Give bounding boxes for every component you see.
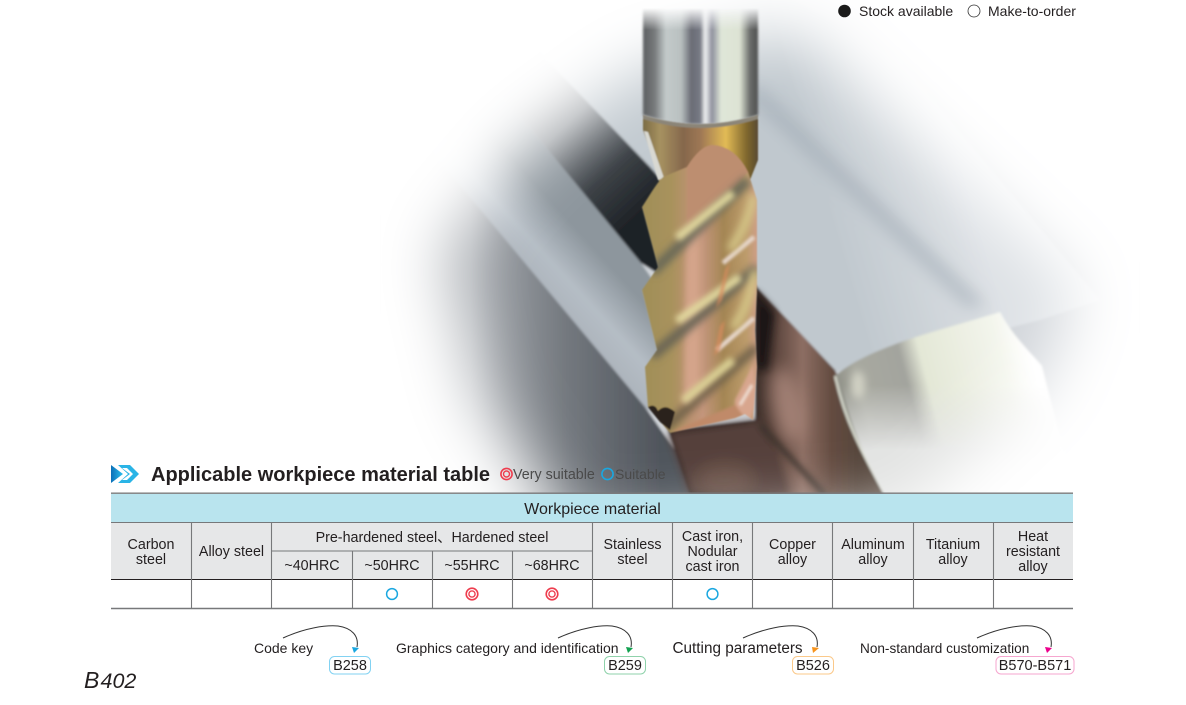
column headings: Carbon xyxy=(128,537,174,553)
column headings: ~40HRC xyxy=(284,558,340,574)
page number: B xyxy=(84,667,99,693)
end mill cutting tool xyxy=(640,0,760,440)
arrow xyxy=(743,626,819,653)
icon: hollow make-to-order dot xyxy=(968,5,980,17)
column headings xyxy=(128,529,1060,575)
column headings: alloy xyxy=(938,552,969,568)
column headings: Nodular xyxy=(687,544,738,560)
stock legend xyxy=(838,3,1076,19)
column headings: cast iron xyxy=(685,559,740,575)
reference: code key xyxy=(254,626,370,674)
reference: cutting parameters xyxy=(672,626,834,674)
reference: non-standard customization xyxy=(860,626,1074,674)
column headings: resistant xyxy=(1006,544,1060,560)
reference: code key: B258 xyxy=(333,658,367,674)
reference: cutting parameters: Cutting parameters xyxy=(672,640,803,657)
chip gash at tool tip xyxy=(648,406,675,430)
column headings: Alloy steel xyxy=(199,544,264,560)
coated flutes xyxy=(640,140,760,440)
column headings: alloy xyxy=(1018,559,1049,575)
column headings: steel xyxy=(617,552,648,568)
arrow xyxy=(283,626,359,653)
column headings: alloy xyxy=(858,552,889,568)
coated neck xyxy=(643,115,758,185)
reference: graphics category xyxy=(396,626,646,674)
section heading: Applicable workpiece material table xyxy=(151,464,490,486)
column headings: ~68HRC xyxy=(524,558,580,574)
reference: cutting parameters: B526 xyxy=(796,658,830,674)
page number: 402 xyxy=(100,669,136,693)
key: suitable: Suitable xyxy=(615,466,666,482)
key: very suitable: Very suitable xyxy=(513,467,595,483)
column headings: Copper xyxy=(769,537,816,553)
workpiece material table xyxy=(111,493,1073,608)
reference: non-standard customization: B570-B571 xyxy=(999,658,1071,674)
column headings: Pre-hardened steel、Hardened steel xyxy=(316,530,548,546)
reference: non-standard customization: Non-standard customization xyxy=(860,641,1029,656)
reference: graphics category: B259 xyxy=(608,658,642,674)
reference: graphics category: Graphics category and identification xyxy=(396,640,619,656)
column headings: steel xyxy=(136,552,166,568)
column headings: Titanium xyxy=(926,537,980,553)
icon: blue double chevron xyxy=(111,465,139,483)
carbide shank xyxy=(643,0,758,124)
column headings: Cast iron, xyxy=(682,529,743,545)
icon: filled stock dot xyxy=(838,5,851,17)
column headings: Stainless xyxy=(603,537,662,553)
table header band: Workpiece material xyxy=(524,501,661,518)
section heading xyxy=(111,464,666,486)
workpiece surfaces fading to white xyxy=(414,6,1091,494)
reference: code key: Code key xyxy=(254,640,313,656)
column headings: alloy xyxy=(778,552,808,568)
column headings: Heat xyxy=(1018,529,1048,545)
column headings: Aluminum xyxy=(841,537,905,553)
column headings: ~55HRC xyxy=(444,558,500,574)
arrow xyxy=(558,626,633,653)
arrow xyxy=(977,626,1052,653)
stock legend: Make-to-order xyxy=(988,3,1076,19)
suitability marks xyxy=(387,588,718,600)
column headings: ~50HRC xyxy=(364,558,420,574)
background photo: end mill cutting a steel groove xyxy=(414,6,1091,494)
table header band xyxy=(111,494,1073,522)
page number xyxy=(84,667,136,693)
stock legend: Stock available xyxy=(859,3,953,19)
